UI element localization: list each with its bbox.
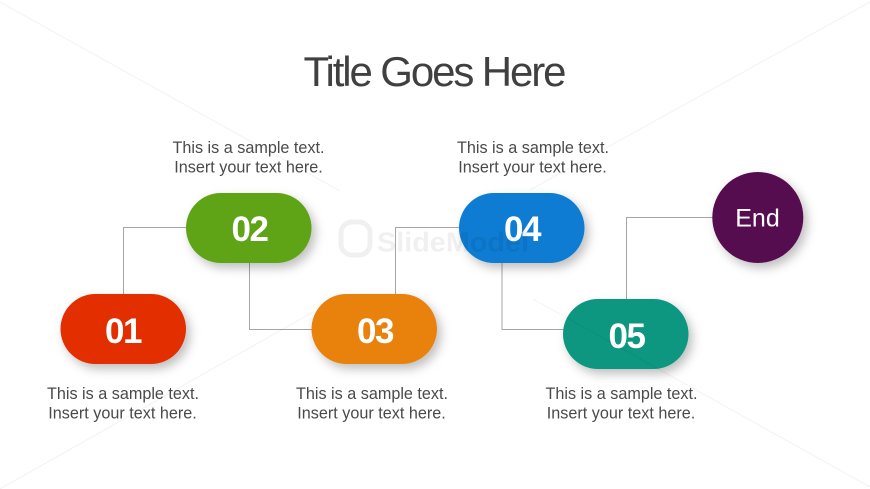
caption: step 03: Insert your text here. — [297, 404, 446, 422]
step 01 pill: 01 — [105, 312, 142, 351]
connector: 03 to 04 — [396, 228, 460, 294]
connector: 05 to End — [626, 218, 713, 299]
caption: step 05: Insert your text here. — [547, 404, 695, 422]
watermark: SlideModel — [377, 226, 529, 258]
caption: step 02: Insert your text here. — [174, 158, 323, 176]
step 01 pill — [60, 294, 186, 364]
end circle — [712, 172, 803, 263]
caption: step 01: Insert your text here. — [48, 404, 197, 422]
step 02 pill — [186, 193, 312, 263]
caption: step 03: This is a sample text. — [296, 385, 448, 403]
connector: 02 to 03 — [250, 263, 312, 330]
step 03 pill — [312, 294, 437, 364]
caption: step 04: Insert your text here. — [458, 158, 607, 176]
title: Title Goes Here — [304, 48, 566, 95]
step 05 pill — [563, 299, 688, 369]
connector: 04 to 05 — [502, 263, 564, 330]
watermark — [341, 222, 529, 258]
caption: step 01: This is a sample text. — [47, 385, 199, 403]
step 03 pill: 03 — [357, 312, 394, 351]
caption: step 02: This is a sample text. — [172, 139, 325, 157]
connector: 01 to 02 — [124, 228, 187, 294]
step 05 pill: 05 — [609, 317, 645, 356]
end circle: End — [735, 204, 780, 232]
caption: step 04: This is a sample text. — [457, 139, 609, 157]
step 04 pill: 04 — [504, 210, 542, 249]
step 02 pill: 02 — [232, 210, 268, 249]
step 04 pill — [459, 193, 584, 263]
caption: step 05: This is a sample text. — [545, 385, 698, 403]
